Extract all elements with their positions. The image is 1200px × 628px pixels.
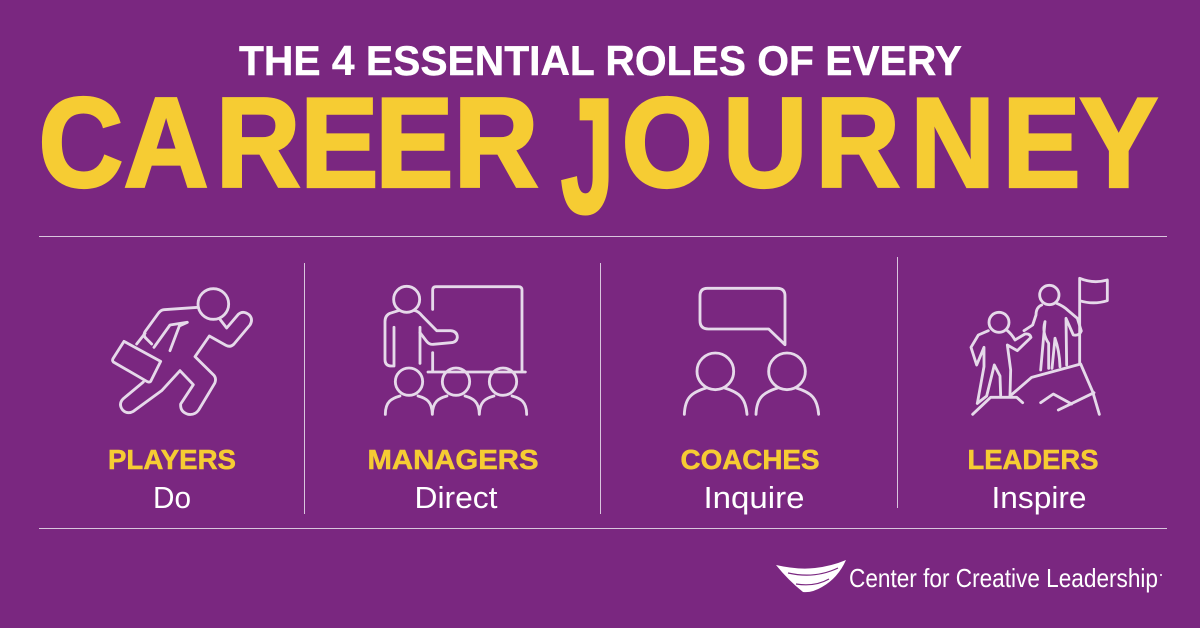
text: inquire: Inquire <box>704 480 804 515</box>
label: managers <box>368 444 538 515</box>
logo: Center for Creative Leadership <box>776 560 1162 593</box>
title line 1: THE 4 ESSENTIAL ROLES OF EVERY <box>239 37 962 84</box>
label: leaders: LEADERS <box>968 444 1098 475</box>
title line 2 <box>39 66 1158 247</box>
icon: manager at whiteboard with audience <box>385 286 527 414</box>
label: coaches <box>680 444 820 515</box>
icon: speech bubble and two coaches <box>684 288 819 414</box>
label: players <box>108 444 236 515</box>
label: leaders <box>968 444 1098 515</box>
icon: running player with briefcase <box>113 289 252 414</box>
icon: leaders climbing to flag <box>971 278 1107 414</box>
label: coaches: COACHES <box>680 444 820 475</box>
label: players: PLAYERS <box>108 444 236 475</box>
title line 2: CAREER <box>39 72 538 214</box>
title line 2: OURNEY <box>622 72 1158 214</box>
title line 2: J <box>561 66 614 247</box>
text: do: Do <box>153 480 191 515</box>
logo: Center for Creative Leadership: Center for Creative Leadership <box>849 563 1158 593</box>
text: inspire: Inspire <box>992 480 1086 515</box>
text: direct: Direct <box>414 480 498 515</box>
label: managers: MANAGERS <box>368 444 538 475</box>
